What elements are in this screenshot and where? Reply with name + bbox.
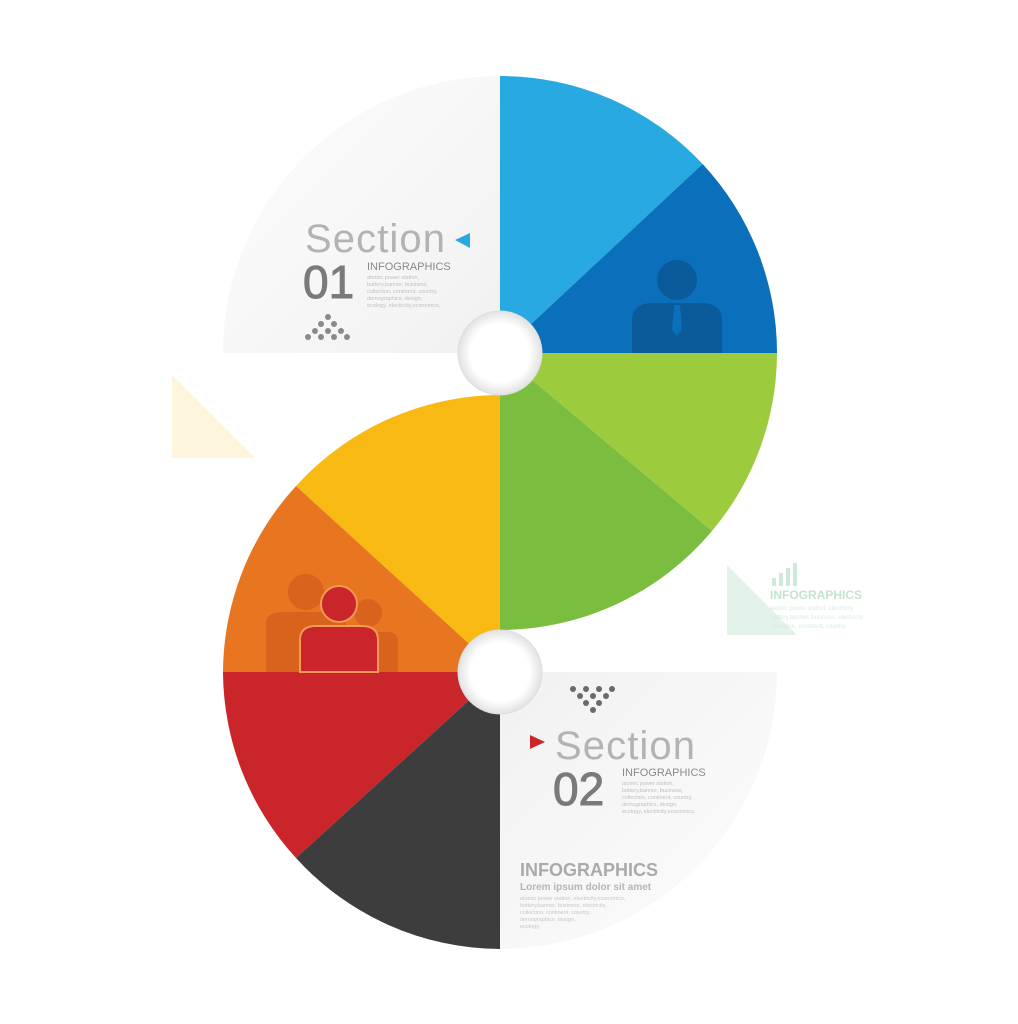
bottom circle: white quadrant (500, 672, 777, 949)
pale green triangle with label: INFOGRAPHICS (770, 588, 862, 602)
section 01 text: Section (305, 217, 445, 261)
icon: dot pyramid 02 (570, 686, 615, 713)
infographics text block: collection, continent, country, (520, 910, 591, 916)
bottom circle: red (223, 672, 500, 858)
hub circles (458, 311, 542, 395)
top circle: dark blue (500, 164, 777, 353)
infographics text block: atomic power station, electricity,economics, (520, 896, 626, 902)
section 02 text: battery,banner, business, (622, 788, 684, 794)
bottom circle: yellow (296, 395, 500, 672)
section 02 text: ecology, electricity,economics, (622, 809, 696, 815)
pale yellow triangle (172, 375, 255, 458)
pale green triangle with label (727, 563, 863, 635)
infographics text block: battery,banner, business, electricity, (520, 903, 607, 909)
section 02 text: INFOGRAPHICS (622, 767, 706, 779)
section 02 text: Section (555, 724, 695, 768)
top circle: white quadrant (223, 76, 500, 353)
top circle: light blue (500, 76, 703, 353)
section 01 text: INFOGRAPHICS (367, 261, 451, 273)
section 01 text: ecology, electricity,economics, (367, 303, 441, 309)
infographics text block (520, 860, 658, 930)
bottom circle: orange (223, 486, 500, 672)
icon: group of people (266, 574, 398, 672)
top circle: green (500, 353, 712, 630)
section 01 text: atomic power station, (367, 275, 419, 281)
icon: dot pyramid 01 (305, 314, 350, 340)
pale green triangle with label: collection, continent, country (770, 624, 846, 630)
infographics text block: demographics, design, (520, 917, 576, 923)
section 02 text: demographics, design, (622, 802, 678, 808)
top circle: light green (500, 353, 777, 531)
pale green triangle with label: atomic power station, electricity (770, 606, 853, 612)
infographics text block: Lorem ipsum dolor sit amet (520, 882, 652, 893)
section 01 text: collection, continent, country, (367, 289, 438, 295)
icon: person (632, 260, 722, 353)
section 02 text: 02 (553, 763, 604, 815)
section 02 text: collection, continent, country, (622, 795, 693, 801)
section 01 text (303, 217, 470, 309)
pale green triangle with label: battery,banner, business, electricity (770, 615, 863, 621)
section 01 text: demographics, design, (367, 296, 423, 302)
section 02 text: atomic power station, (622, 781, 674, 787)
infographics text block: INFOGRAPHICS (520, 860, 658, 880)
infographics text block: ecology, (520, 924, 541, 930)
bottom circle: dark gray (296, 672, 500, 949)
section 02 text (530, 724, 706, 815)
section 01 text: 01 (303, 256, 354, 308)
section 01 text: battery,banner, business, (367, 282, 429, 288)
